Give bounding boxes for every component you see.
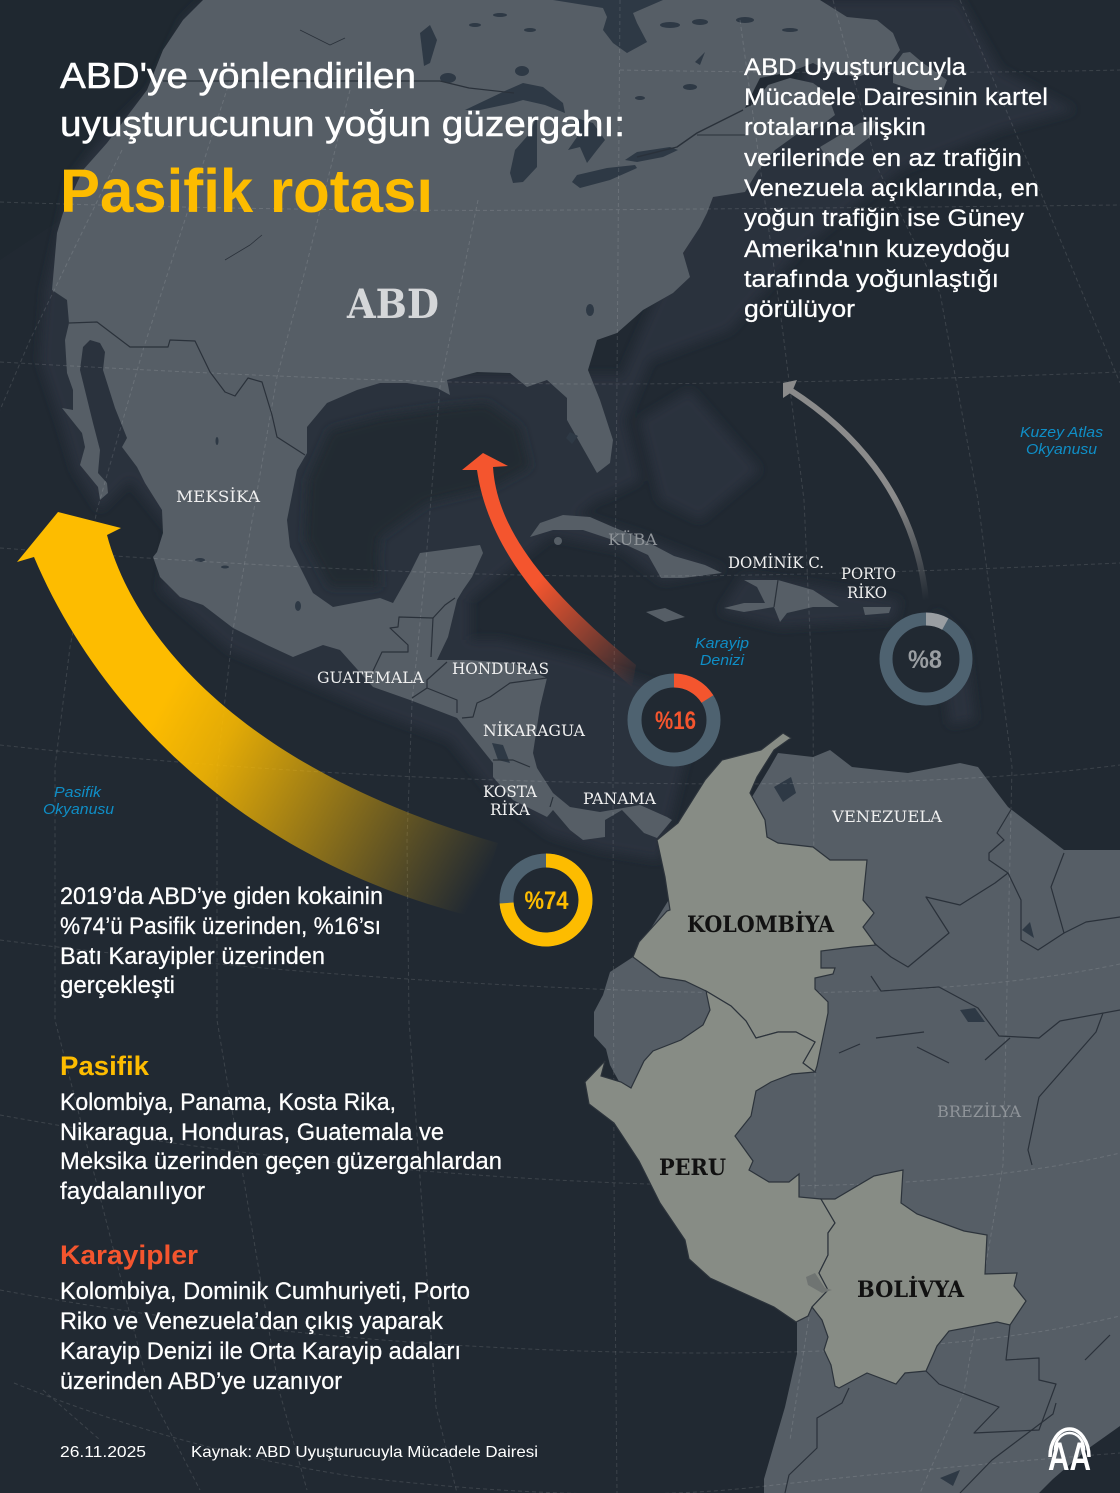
island: Puerto Rico xyxy=(863,607,891,615)
footer xyxy=(60,1444,538,1461)
label: Dominik C.: DOMİNİK C. xyxy=(728,552,824,572)
text block: Karayipler xyxy=(60,1240,470,1395)
land: Peru xyxy=(585,991,835,1322)
island: Hispaniola xyxy=(724,580,839,622)
text block: Karayipler: Karayip Denizi ile Orta Karayip adaları xyxy=(60,1338,461,1365)
donut: 74 percent: %74 xyxy=(524,887,569,915)
donut: 16 percent xyxy=(628,674,720,766)
intro text top right: yoğun trafiğin ise Güney xyxy=(744,205,1024,232)
text block: 2019 summary: Batı Karayipler üzerinden xyxy=(60,943,325,970)
intro text top right: tarafında yoğunlaştığı xyxy=(744,266,999,293)
label: Karayip Denizi: Denizi xyxy=(700,652,745,669)
icon: AA logo xyxy=(1048,1429,1091,1479)
text block: 2019 summary: 2019’da ABD’ye giden kokainin xyxy=(60,883,383,910)
label: Nikaragua: NİKARAGUA xyxy=(483,720,585,740)
lakes xyxy=(195,0,1034,1486)
text block: Pasifik: Kolombiya, Panama, Kosta Rika, xyxy=(60,1089,396,1116)
intro text top right: verilerinde en az trafiğin xyxy=(744,145,1022,172)
coastal shelf water xyxy=(40,0,1075,860)
icon: AA logo: AA xyxy=(1048,1435,1091,1479)
heading: Karayipler: Karayipler xyxy=(60,1240,199,1270)
label: Kuzey Atlas Okyanusu: Okyanusu xyxy=(1026,441,1098,458)
label: Kuzey Atlas Okyanusu xyxy=(1020,424,1104,458)
text block: Pasifik: Meksika üzerinden geçen güzergahlardan xyxy=(60,1148,502,1175)
land: South America xyxy=(594,750,1120,1493)
text block: 2019 summary xyxy=(60,883,383,999)
label: Kosta Rika: RİKA xyxy=(490,799,530,819)
land: North and Central America xyxy=(52,0,900,840)
text block: Pasifik: faydalanılıyor xyxy=(60,1178,205,1205)
label: Peru: PERU xyxy=(659,1155,726,1181)
label: Pasifik Okyanusu: Okyanusu xyxy=(43,801,115,818)
date: 26.11.2025 xyxy=(60,1444,146,1461)
label: Porto Riko xyxy=(841,564,896,602)
country labels xyxy=(176,281,1021,1303)
label: Kolombiya: KOLOMBİYA xyxy=(687,910,835,938)
heading: Pasifik: Pasifik xyxy=(60,1051,150,1081)
caribbean islands xyxy=(530,515,891,622)
intro text top right: rotalarına ilişkin xyxy=(744,114,926,141)
label: Guatemala: GUATEMALA xyxy=(317,668,424,687)
label: Brezilya: BREZİLYA xyxy=(937,1101,1021,1121)
text block: Karayipler: Kolombiya, Dominik Cumhuriyeti, Porto xyxy=(60,1278,470,1305)
text block: Pasifik: Nikaragua, Honduras, Guatemala ve xyxy=(60,1119,444,1146)
label: ABD: ABD xyxy=(346,281,439,328)
label: Meksika: MEKSİKA xyxy=(176,486,260,506)
label: Küba: KÜBA xyxy=(608,529,657,549)
land: Nova Scotia xyxy=(820,120,877,163)
label: Karayip Denizi xyxy=(695,635,749,669)
text block: Pasifik xyxy=(60,1051,502,1205)
label: Porto Riko: PORTO xyxy=(841,564,896,583)
label: Pasifik Okyanusu: Pasifik xyxy=(54,784,103,801)
intro text top right: ABD Uyuşturucuyla xyxy=(744,54,967,81)
text block: 2019 summary: %74’ü Pasifik üzerinden, %16’sı xyxy=(60,913,381,940)
label: Honduras: HONDURAS xyxy=(452,659,549,678)
text block: Karayipler: üzerinden ABD’ye uzanıyor xyxy=(60,1368,342,1395)
donut: 74 percent xyxy=(500,854,592,946)
title line 1: ABD'ye yönlendirilen xyxy=(60,55,416,96)
title line 2: uyuşturucunun yoğun güzergahı: xyxy=(60,103,625,144)
island: Isla de la Juventud xyxy=(554,537,562,545)
text block: 2019 summary: gerçekleşti xyxy=(60,972,175,999)
intro text top right: Venezuela açıklarında, en xyxy=(744,175,1039,202)
lake Titicaca xyxy=(806,1273,832,1293)
title block xyxy=(60,55,625,225)
land: Bolivia xyxy=(812,1170,1026,1388)
land: Colombia xyxy=(633,733,876,1072)
arrow: grey route xyxy=(783,380,926,600)
donut: 8 percent: %8 xyxy=(908,646,942,674)
gulf of Mexico deep basin xyxy=(305,403,530,587)
label: Pasifik Okyanusu xyxy=(43,784,115,818)
text block: Karayipler: Riko ve Venezuela’dan çıkış yaparak xyxy=(60,1308,444,1335)
label: Kuzey Atlas Okyanusu: Kuzey Atlas xyxy=(1020,424,1104,441)
label: Karayip Denizi: Karayip xyxy=(695,635,749,652)
title highlight: Pasifik rotası xyxy=(60,157,433,225)
island: Cuba xyxy=(530,515,722,578)
donut: 16 percent: %16 xyxy=(655,707,696,735)
label: Panama: PANAMA xyxy=(583,789,656,808)
label: Venezuela: VENEZUELA xyxy=(831,807,942,826)
donut: 8 percent xyxy=(880,613,972,705)
label: Kosta Rika: KOSTA xyxy=(483,782,537,801)
intro text top right: görülüyor xyxy=(744,296,855,323)
label: Porto Riko: RİKO xyxy=(847,582,887,602)
darker north-west ocean xyxy=(0,0,200,260)
island: Jamaica xyxy=(646,608,685,622)
source: Kaynak: ABD Uyuşturucuyla Mücadele Dairesi xyxy=(191,1444,538,1461)
arrow: Caribbean route orange xyxy=(462,453,636,687)
label: Bolivya: BOLİVYA xyxy=(857,1275,965,1303)
label: Kosta Rika xyxy=(483,782,537,819)
intro text top right xyxy=(744,54,1048,323)
land: Newfoundland xyxy=(893,52,947,90)
ocean labels xyxy=(43,424,1104,818)
intro text top right: Mücadele Dairesinin kartel xyxy=(744,84,1048,111)
arrow: Pacific route yellow xyxy=(17,512,498,917)
intro text top right: Amerika'nın kuzeydoğu xyxy=(744,236,1010,263)
